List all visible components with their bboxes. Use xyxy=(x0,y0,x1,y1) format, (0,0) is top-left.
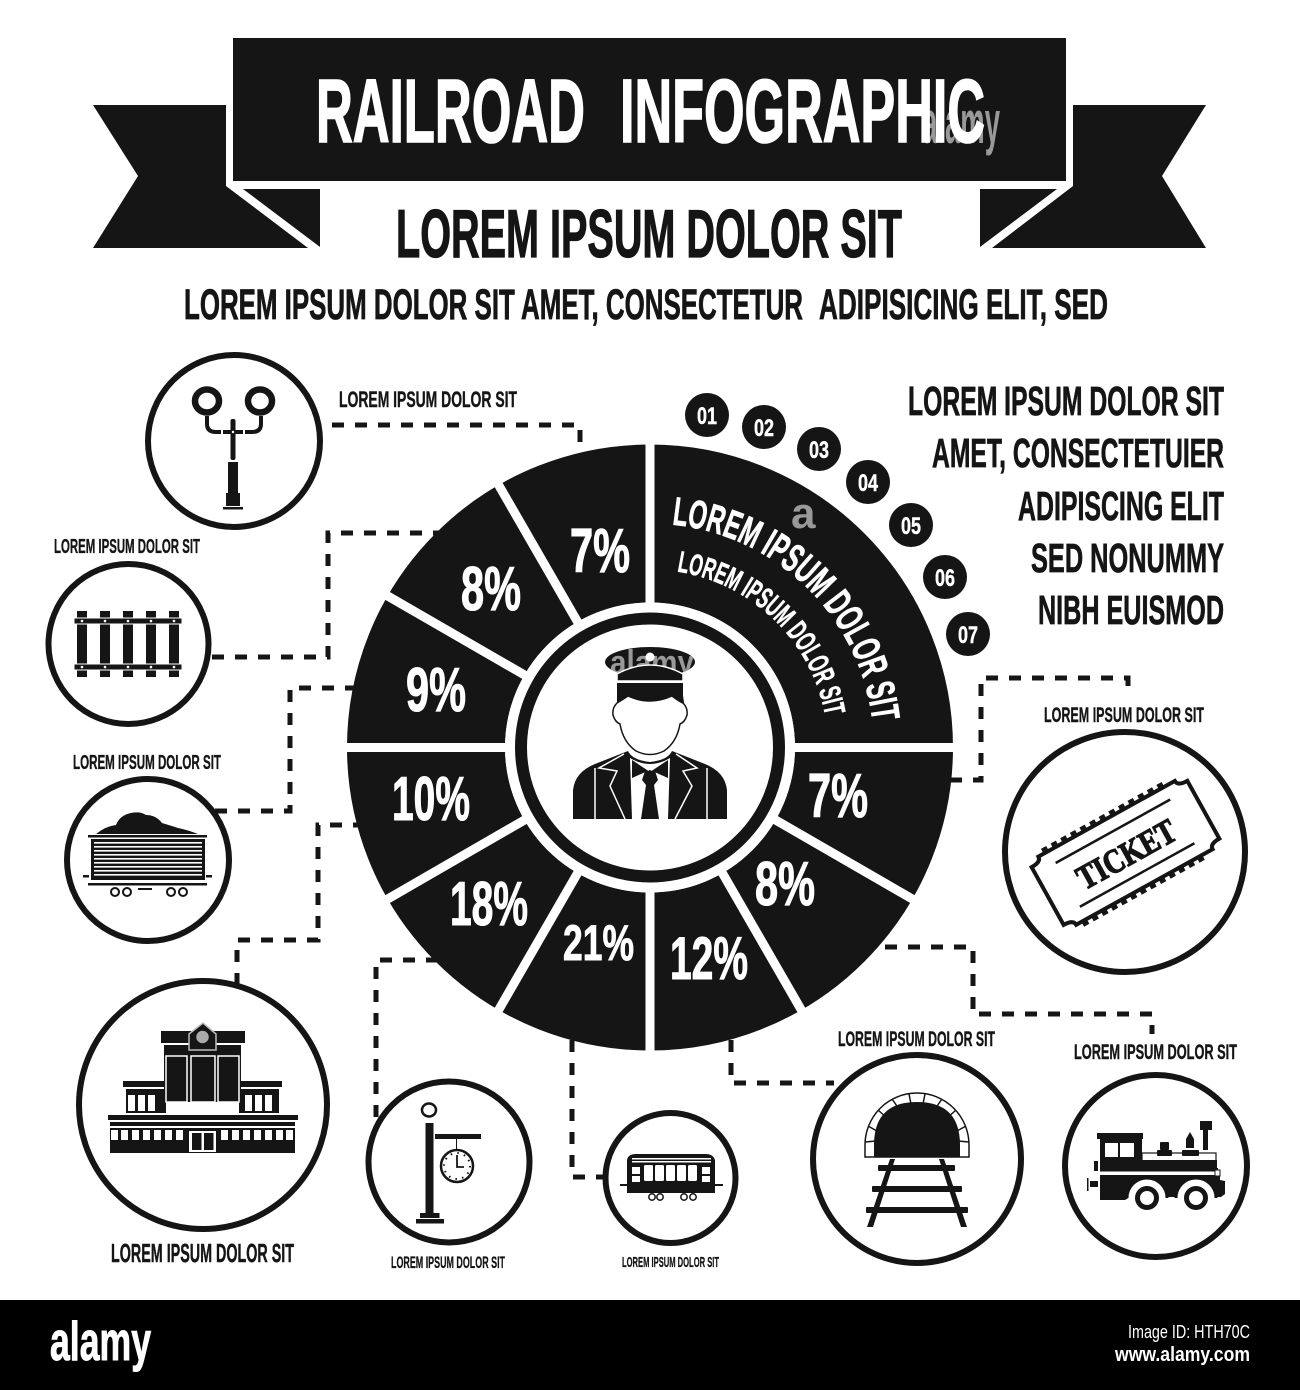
label: passenger coach: LOREM IPSUM DOLOR SIT xyxy=(622,1254,719,1271)
numbered dots: 03 xyxy=(809,437,829,464)
panel: passenger coach xyxy=(606,1113,736,1271)
percentage labels: 9% xyxy=(406,656,466,725)
icon: station building xyxy=(108,1023,298,1153)
footer logo: alamy xyxy=(50,1310,151,1372)
label: station: LOREM IPSUM DOLOR SIT xyxy=(111,1238,294,1268)
icon: passenger coach xyxy=(620,1154,723,1200)
panel: station xyxy=(79,981,327,1268)
website: www.alamy.com xyxy=(1114,1344,1250,1366)
numbered dots: 01 xyxy=(697,403,717,430)
panel: track xyxy=(48,536,208,724)
icon: tunnel and tracks xyxy=(865,1093,969,1227)
curved heading: LOREM IPSUM DOLOR SIT xyxy=(673,497,900,718)
percentage labels: 10% xyxy=(392,765,470,834)
footer bar xyxy=(0,1300,1300,1390)
panel: ticket xyxy=(1005,704,1245,972)
numbered dots: 07 xyxy=(958,622,978,649)
curved subheading: LOREM IPSUM DOLOR SIT xyxy=(678,551,846,712)
label: track: LOREM IPSUM DOLOR SIT xyxy=(54,536,200,558)
icon: conductor: alamy xyxy=(610,644,694,682)
chart segments xyxy=(330,430,970,1065)
numbered dots xyxy=(685,393,990,656)
watermark letter: a xyxy=(791,489,816,538)
icon: conductor xyxy=(573,644,727,819)
icon: ticket xyxy=(1027,773,1224,933)
title banner: INFOGRAPHIC xyxy=(620,62,985,162)
label: coal wagon: LOREM IPSUM DOLOR SIT xyxy=(73,752,221,774)
label: signal: LOREM IPSUM DOLOR SIT xyxy=(339,387,517,412)
percentage labels: 8% xyxy=(461,555,521,624)
text block: right list xyxy=(908,378,1224,633)
numbered dots: 06 xyxy=(935,565,955,592)
numbered dots: 05 xyxy=(901,513,921,540)
donut chart xyxy=(347,444,953,1050)
title banner: alamy xyxy=(922,89,1000,156)
connector lines xyxy=(212,425,1152,1177)
image id: Image ID: HTH70C xyxy=(1128,1322,1250,1342)
label: tunnel: LOREM IPSUM DOLOR SIT xyxy=(838,1028,995,1051)
panel: platform clock xyxy=(368,1082,530,1272)
icon: railway track xyxy=(74,611,182,677)
percentage labels: 7% xyxy=(570,517,630,586)
title banner: RAILROAD xyxy=(316,62,585,162)
percentage labels: 8% xyxy=(755,850,815,919)
icon: platform clock xyxy=(416,1104,481,1224)
panel: coal wagon xyxy=(67,752,229,941)
percentage labels xyxy=(392,517,868,992)
panel: locomotive xyxy=(1065,1041,1247,1257)
icon: ticket: TICKET xyxy=(1070,813,1183,897)
panel: signal xyxy=(148,355,517,527)
icon: coal wagon xyxy=(83,812,212,896)
numbered dots: 04 xyxy=(858,470,878,497)
tagline: ADIPISICING ELIT, SED xyxy=(819,281,1108,329)
icon: railway signal xyxy=(195,390,272,510)
label: platform clock: LOREM IPSUM DOLOR SIT xyxy=(391,1253,505,1272)
numbered dots: 02 xyxy=(754,415,774,442)
title banner xyxy=(93,38,1206,248)
icon: steam locomotive xyxy=(1087,1121,1225,1208)
subtitle: LOREM IPSUM DOLOR SIT xyxy=(396,196,902,272)
percentage labels: 21% xyxy=(563,915,634,971)
panel: tunnel xyxy=(813,1028,1021,1263)
tagline: LOREM IPSUM DOLOR SIT AMET, CONSECTETUR xyxy=(184,281,803,329)
percentage labels: 7% xyxy=(808,762,868,831)
percentage labels: 18% xyxy=(450,870,528,939)
percentage labels: 12% xyxy=(670,925,748,992)
